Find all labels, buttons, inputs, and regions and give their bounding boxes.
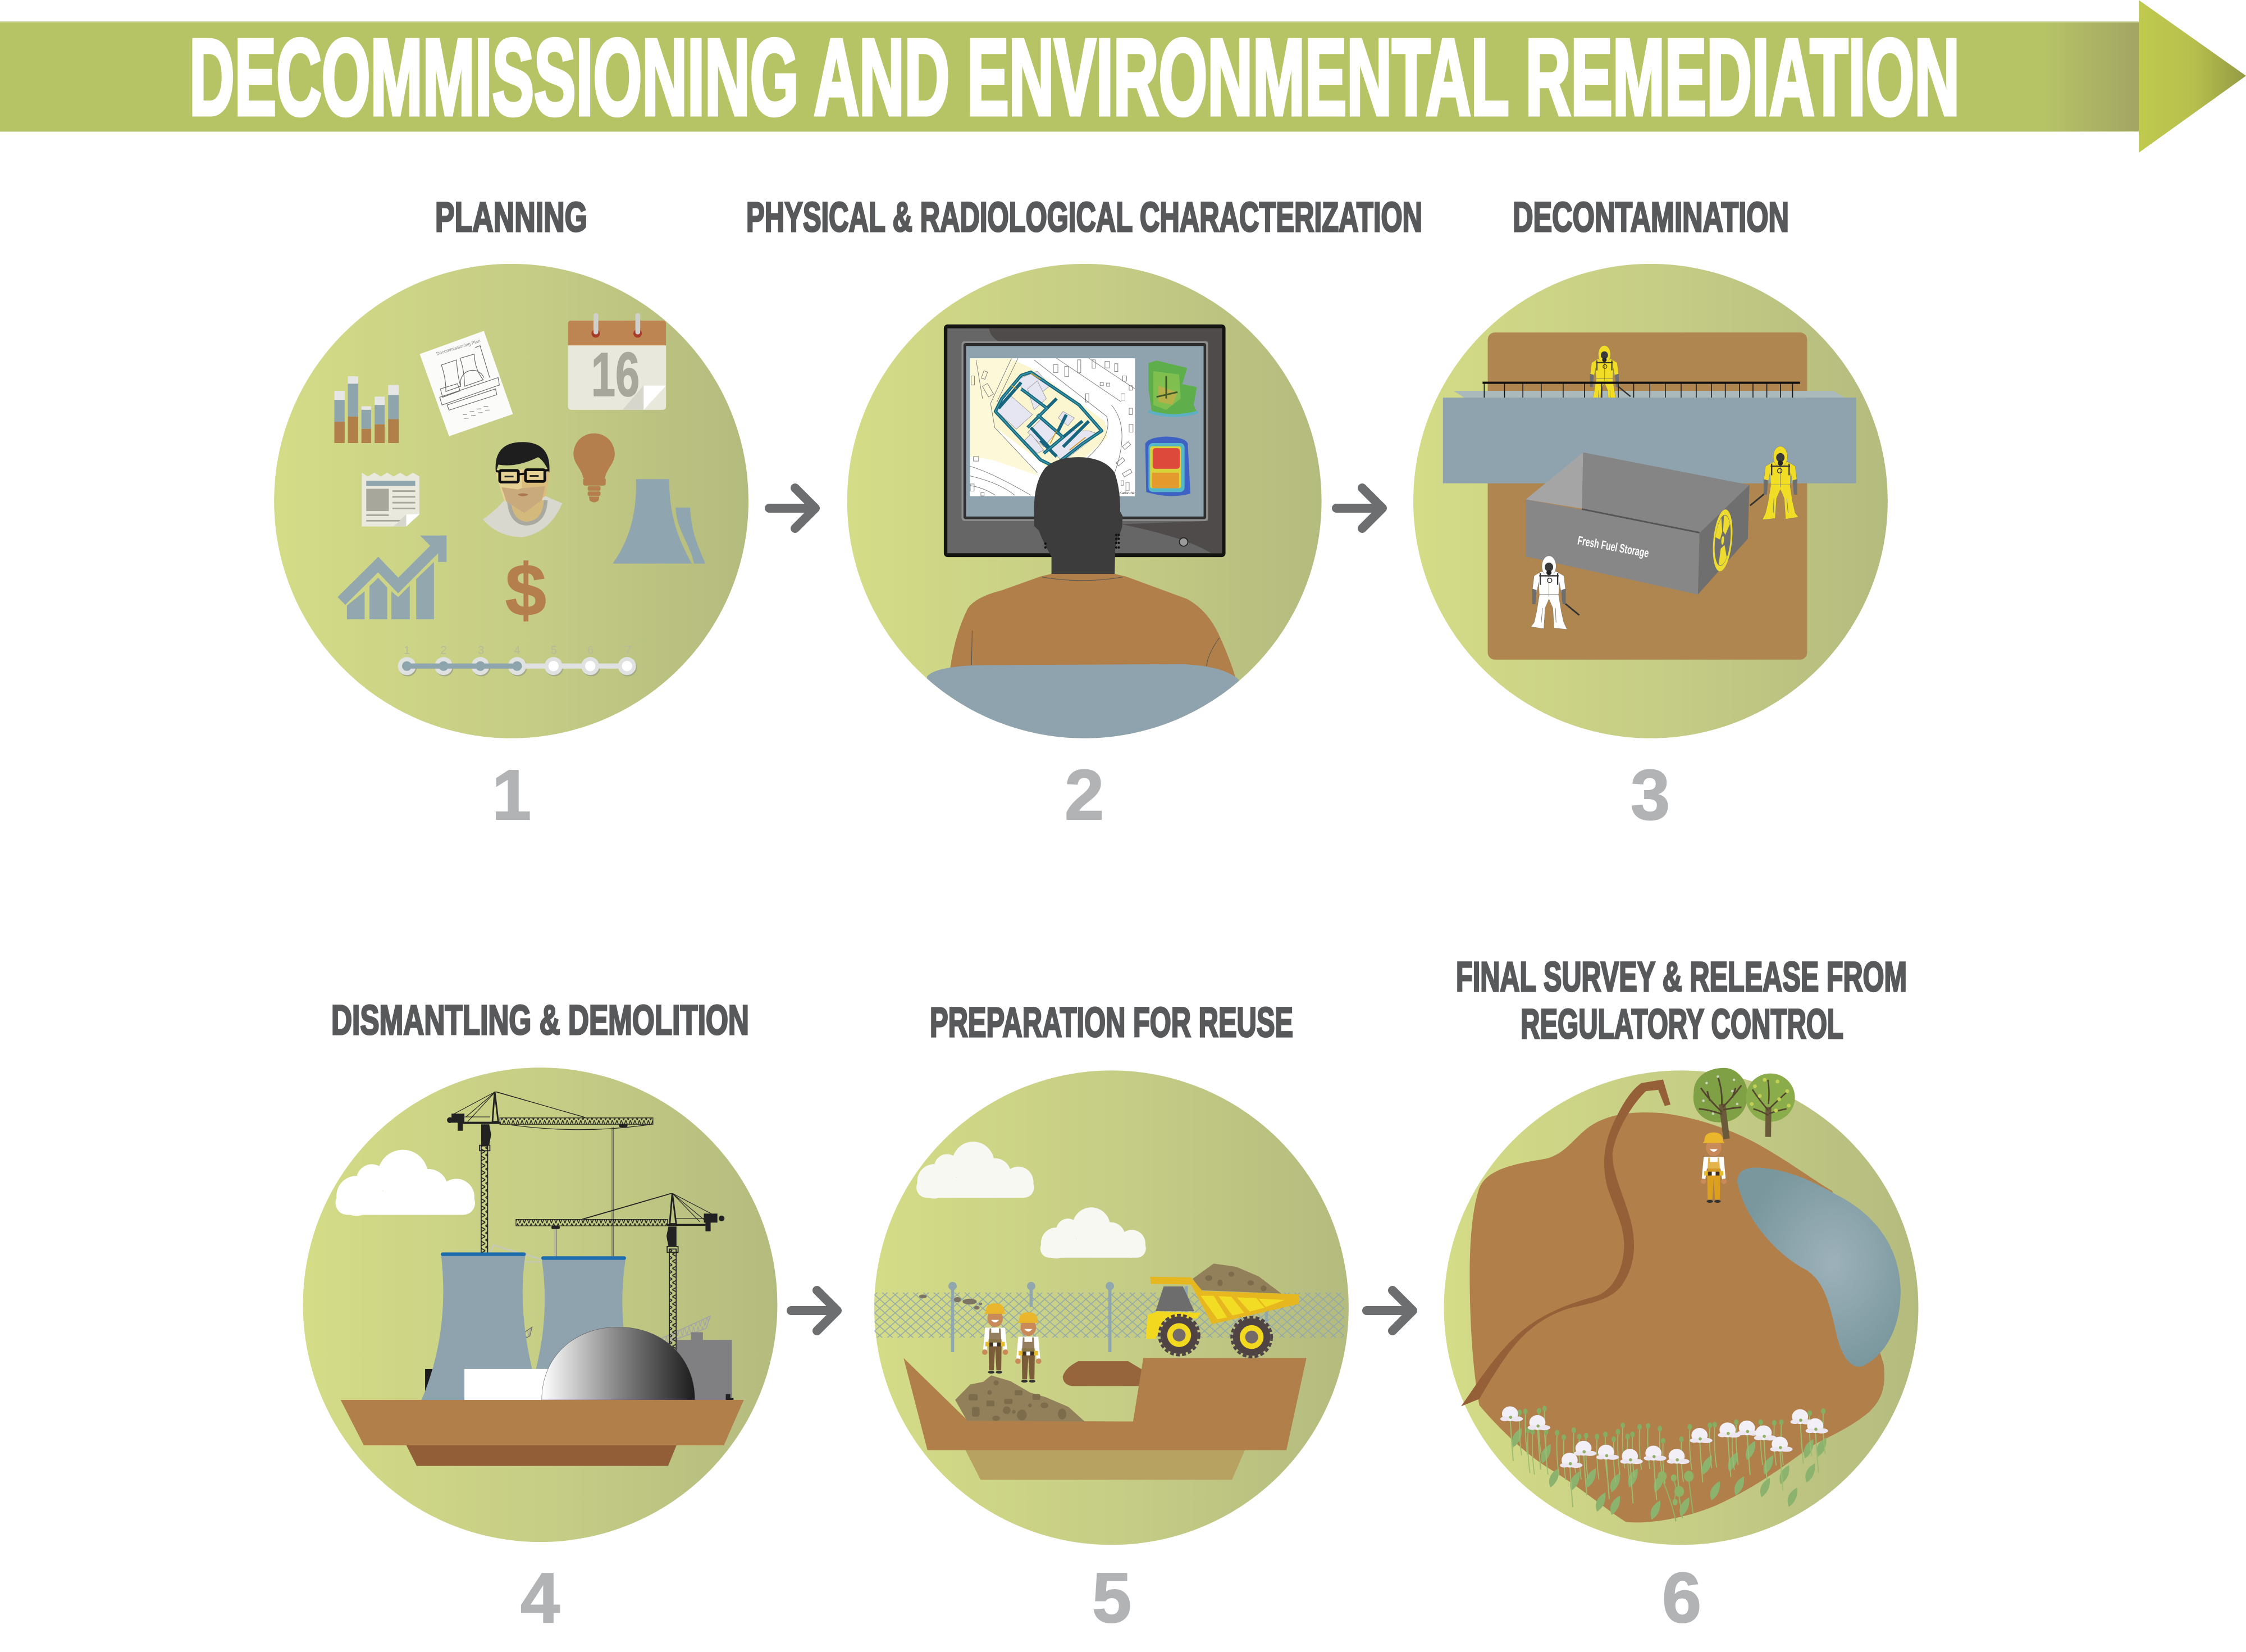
icon: newspaper (362, 473, 419, 527)
panel: characterization (847, 264, 1322, 763)
icon: stacked bar chart (334, 376, 399, 443)
cloud large (916, 1142, 1034, 1199)
land (1469, 1112, 1884, 1522)
worker in white suit (1531, 556, 1579, 629)
white building (464, 1369, 551, 1400)
cloud (335, 1150, 475, 1216)
worker left (982, 1303, 1008, 1373)
chain-link fence (875, 1282, 1344, 1352)
box label: Fresh Fuel Storage (1577, 533, 1650, 560)
speaker dots (1046, 535, 1119, 547)
worker in yellow suit behind railing (1590, 345, 1631, 398)
3D radiation model: green (1148, 360, 1198, 416)
poppy field (1500, 1405, 1828, 1521)
grey crane remains (490, 1245, 710, 1344)
heading: final survey and release from regulatory control: REGULATORY CONTROL (1521, 1001, 1843, 1047)
excavated ground (903, 1358, 1307, 1450)
icon: cooling towers (613, 479, 705, 564)
icon: calendar (568, 313, 666, 410)
panel: planning (274, 264, 748, 738)
dump truck (1146, 1263, 1299, 1357)
dark mound (1063, 1361, 1143, 1386)
heading: decontamination: DECONTAMINATION (1513, 194, 1789, 240)
reactor dome (542, 1327, 695, 1400)
arrow: step 2 to 3 (1336, 488, 1382, 528)
icon: light bulb (573, 433, 615, 503)
timeline progress: 1 (404, 644, 410, 656)
tower crane right (516, 1193, 724, 1354)
tower crane left (447, 1092, 653, 1256)
arrow: step 5 to 6 (1367, 1290, 1413, 1331)
icon: calendar: 16 (591, 340, 640, 409)
floor top edge (1454, 391, 1845, 398)
turbine hall block (425, 1369, 438, 1400)
site map (970, 358, 1135, 496)
tree left (1693, 1068, 1748, 1139)
worker right (1015, 1312, 1042, 1382)
timeline progress: 7 (625, 644, 632, 656)
panel: decontamination (1413, 264, 1888, 738)
icon: engineer portrait (483, 442, 562, 537)
cloud small (1040, 1207, 1146, 1258)
panel: dismantling (303, 1067, 777, 1542)
concrete slab (1443, 398, 1856, 483)
number 5: 5 (1092, 1558, 1131, 1637)
number 4: 4 (521, 1558, 560, 1637)
worker in yellow suit, right (1750, 446, 1798, 520)
heading: preparation for reuse: PREPARATION FOR REUSE (930, 999, 1293, 1046)
panel: preparation for reuse (874, 1070, 1349, 1545)
cooling tower left (422, 1254, 537, 1400)
number 2: 2 (1065, 755, 1104, 834)
heading: final survey and release from regulatory control (1456, 953, 1907, 1047)
surveyor worker (1701, 1133, 1727, 1203)
timeline progress: 5 (551, 644, 557, 656)
icon: dollar sign: $ (505, 549, 546, 631)
ground lower layer (965, 1450, 1245, 1480)
monitor (944, 325, 1226, 557)
site map: Karlsruhe (1120, 491, 1135, 495)
arrow: step 1 to 2 (769, 488, 815, 528)
river (1461, 1079, 1670, 1406)
cooling tower right (536, 1258, 627, 1369)
soil pile (955, 1375, 1085, 1421)
3D radiation model: heat map (1145, 437, 1190, 496)
number 1: 1 (492, 755, 531, 834)
panel: final survey (1444, 1068, 1918, 1545)
timeline progress: 6 (587, 644, 594, 656)
radiation sign (1714, 505, 1732, 576)
ground lower layer (407, 1445, 677, 1466)
flying rocks (919, 1294, 982, 1309)
heading: physical and radiological characterization: PHYSICAL & RADIOLOGICAL CHARACTERIZATION (746, 194, 1422, 240)
person sweater (950, 574, 1235, 677)
heading: final survey and release from regulatory control: FINAL SURVEY & RELEASE FROM (1456, 953, 1907, 1000)
water pond (1737, 1167, 1901, 1367)
ground upper layer (341, 1400, 744, 1445)
timeline progress: 3 (478, 644, 484, 656)
monitor power button (1179, 538, 1188, 546)
timeline progress: 4 (514, 644, 521, 656)
tree right (1746, 1074, 1795, 1137)
timeline progress (398, 644, 637, 677)
arrow: step 4 to 5 (791, 1290, 837, 1331)
icon: decommissioning plan document (420, 331, 513, 436)
number 6: 6 (1662, 1558, 1701, 1637)
timeline progress: 2 (440, 644, 447, 656)
icon: growth chart arrow (341, 536, 446, 619)
fresh fuel storage box (1526, 453, 1750, 595)
icon: decommissioning plan document: Decommissioning Plan (436, 338, 481, 357)
reactor auxiliary building (677, 1332, 732, 1400)
railing (1482, 383, 1800, 398)
heading: planning: PLANNING (435, 194, 587, 240)
soil area (1488, 332, 1807, 660)
person silhouette (1034, 457, 1122, 575)
chair back (926, 664, 1239, 738)
title banner arrow (0, 0, 2246, 153)
heading: dismantling and demolition: DISMANTLING & DEMOLITION (331, 997, 749, 1043)
number 3: 3 (1631, 755, 1670, 834)
